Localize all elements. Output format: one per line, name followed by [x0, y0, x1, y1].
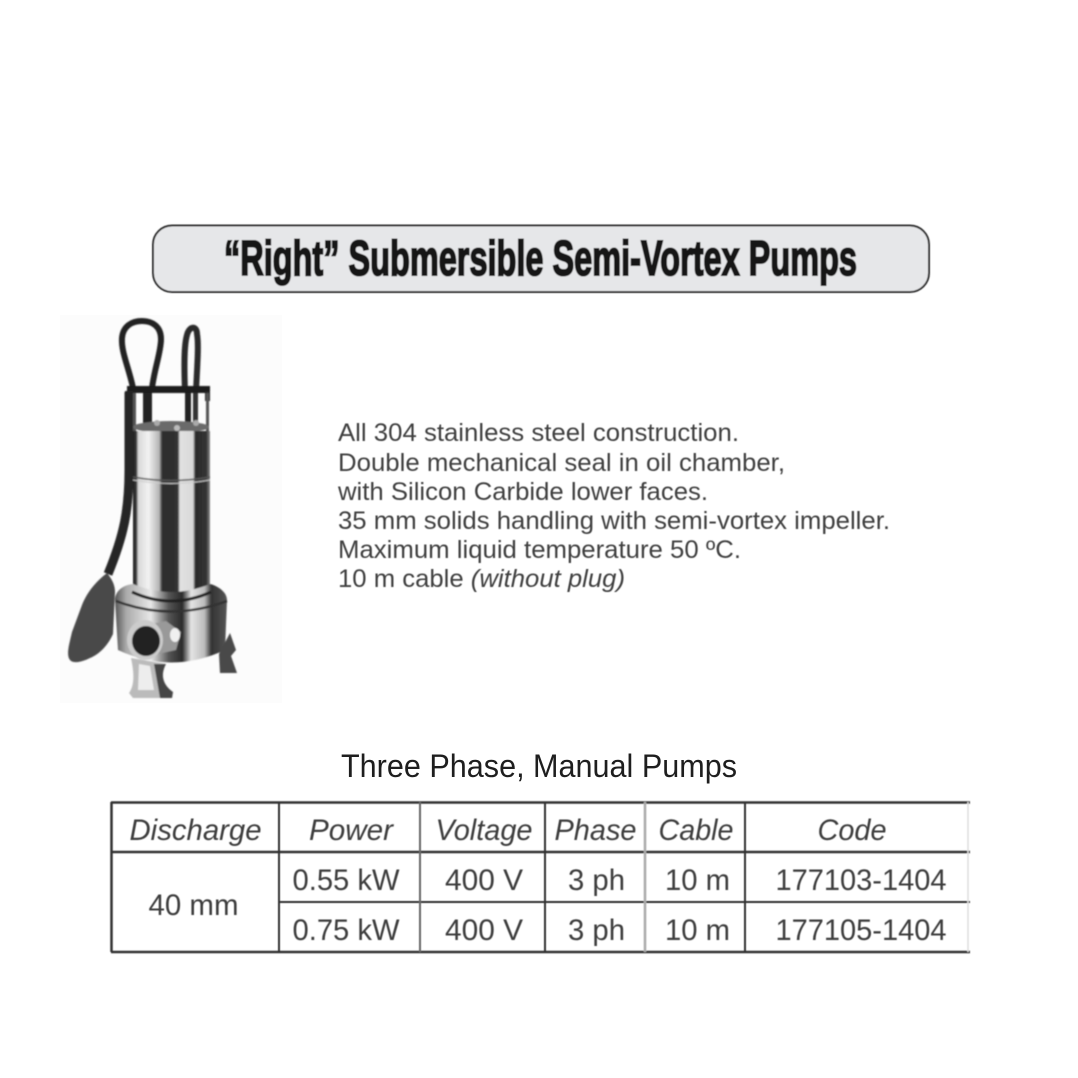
table data rows: 177105-1404	[776, 914, 946, 947]
table header row: Code	[818, 814, 886, 847]
table header row: Phase	[554, 814, 636, 847]
table data rows: 0.55 kW	[292, 864, 400, 897]
table data rows	[148, 864, 946, 947]
table data rows: 177103-1404	[776, 864, 946, 897]
description text: Maximum liquid temperature 50 ºC.	[338, 536, 741, 564]
icon: submersible pump	[68, 321, 237, 698]
table header row: Power	[309, 814, 394, 847]
description text: with Silicon Carbide lower faces.	[337, 478, 708, 506]
table header row	[130, 814, 886, 847]
description text: 10 m cable (without plug)	[338, 565, 625, 593]
table data rows: 10 m	[665, 914, 730, 947]
table data rows: 3 ph	[568, 864, 625, 897]
description text: All 304 stainless steel construction.	[338, 419, 739, 447]
table data rows: 10 m	[665, 864, 730, 897]
table header row: Discharge	[130, 814, 262, 847]
specifications table	[111, 802, 970, 952]
description text: 35 mm solids handling with semi-vortex impeller.	[338, 507, 890, 535]
table data rows: 400 V	[445, 914, 523, 947]
description text: Double mechanical seal in oil chamber,	[338, 449, 785, 477]
pump photo	[60, 315, 282, 703]
table data rows: 0.75 kW	[292, 914, 400, 947]
title banner	[153, 226, 929, 292]
table data rows: 40 mm	[148, 889, 238, 922]
table data rows: 400 V	[445, 864, 523, 897]
description text	[337, 419, 890, 593]
table header row: Voltage	[436, 814, 532, 847]
table heading: Three Phase, Manual Pumps	[341, 748, 737, 784]
table data rows: 3 ph	[568, 914, 625, 947]
table header row: Cable	[658, 814, 734, 847]
